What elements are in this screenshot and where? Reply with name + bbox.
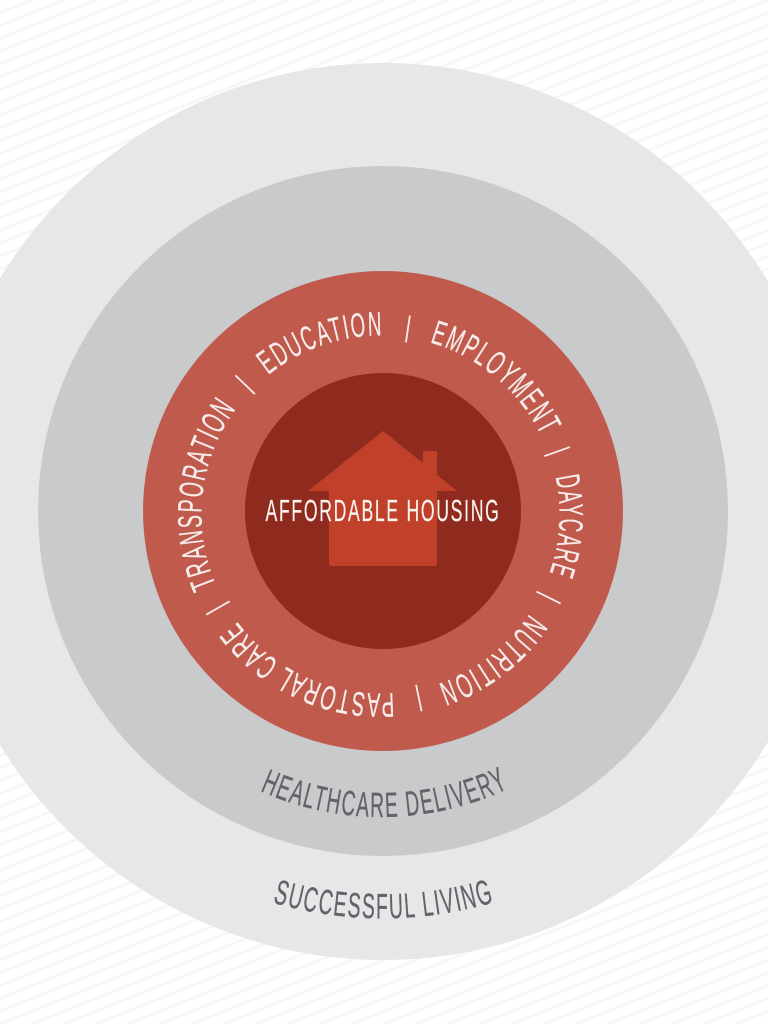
- label: successful living: SUCCESSFUL LIVING: [274, 880, 492, 919]
- ring label: employment: EMPLOYMENT: [431, 320, 562, 432]
- ring separator: [536, 592, 561, 604]
- circle: healthcare delivery: [38, 166, 728, 856]
- ring label: education: EDUCATION: [255, 312, 380, 374]
- ring separator: [416, 685, 422, 711]
- circle: affordable housing core: [245, 373, 521, 649]
- ring separator: [235, 375, 255, 394]
- ring label: nutrition: NUTRITION: [439, 614, 548, 706]
- ring label: daycare: DAYCARE: [550, 474, 584, 579]
- icon: house: [308, 431, 457, 566]
- circle: services ring: [143, 271, 623, 751]
- ring separator: [544, 447, 570, 456]
- title: affordable housing: AFFORDABLE HOUSING: [266, 493, 500, 528]
- label: healthcare delivery: HEALTHCARE DELIVERY: [261, 766, 504, 818]
- ring separator: [206, 601, 230, 615]
- ring label: pastoral care: PASTORAL CARE: [219, 622, 394, 717]
- ring separator: [406, 316, 410, 342]
- ring label: transporation: TRANSPORATION: [178, 396, 235, 594]
